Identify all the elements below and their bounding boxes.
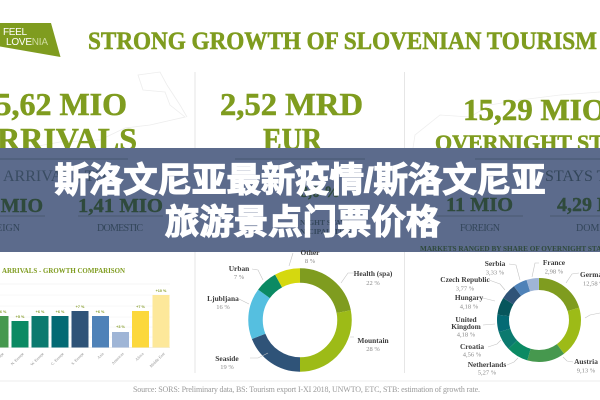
donut labels: markets: Kingdom — [451, 322, 482, 331]
stat: export revenue — [220, 86, 363, 157]
donut labels: destination type: 19 % — [220, 364, 234, 371]
donut chart: tourism by destination type — [256, 276, 344, 364]
stat: export revenue: EUR — [263, 121, 323, 157]
bar chart: S. Europe — [70, 351, 85, 366]
bar chart: +6 % — [56, 310, 65, 314]
band sub-stats left — [0, 159, 163, 234]
bar chart: C. Europe — [50, 351, 65, 366]
donut labels: destination type: 8 % — [305, 258, 316, 265]
donut labels: destination type — [207, 248, 393, 371]
donut labels: destination type: 16 % — [216, 304, 230, 311]
donut labels: destination type: Health (spa) — [354, 269, 393, 278]
donut labels: markets: 4,56 % — [463, 352, 482, 358]
logo: Feel Slovenia: FEEL — [3, 27, 27, 38]
donut labels: markets: Netherlands — [468, 360, 506, 369]
band sub-stats left: DOMESTIC — [97, 223, 143, 234]
column divider left — [194, 72, 196, 373]
bar chart: +6 % — [96, 310, 105, 314]
map outline: right — [413, 92, 600, 148]
bar chart: +10 % — [156, 289, 167, 293]
bar chart: N. Europe — [10, 351, 25, 366]
bar chart: W. Europe — [29, 351, 45, 367]
bar chart title: ARRIVALS - GROWTH COMPARISON — [2, 266, 125, 275]
logo: Feel Slovenia — [0, 23, 60, 57]
donut labels: markets: 3,77 % — [456, 286, 475, 292]
band sub-stats right: FOREIGN — [460, 223, 500, 234]
stat: arrivals — [0, 86, 137, 157]
band sub-stats left: ARRIVALS TO — [3, 168, 106, 185]
donut labels: markets: Croatia — [460, 342, 484, 351]
band sub-stats middle — [235, 159, 365, 236]
bar chart: +7 % — [76, 305, 85, 309]
column divider right — [404, 72, 406, 373]
band sub-stats right — [437, 159, 600, 234]
donut labels: destination type: 28 % — [366, 346, 380, 353]
band sub-stats middle: 8,0 % — [300, 184, 340, 201]
band sub-stats right: 11 MIO — [446, 194, 513, 216]
stat: export revenue: 2,52 MRD — [220, 86, 363, 122]
headline overlay text — [54, 162, 546, 242]
donut labels: markets: United — [455, 315, 478, 324]
donut labels: markets: Czech Republic — [440, 275, 490, 284]
donut chart: markets by overnight stays — [503, 284, 575, 356]
donut labels: markets: France — [543, 258, 566, 267]
headline overlay text: 斯洛文尼亚最新疫情/斯洛文尼亚 — [54, 162, 546, 200]
donut labels: markets — [440, 258, 600, 376]
donut labels: destination type: 7 % — [234, 274, 245, 281]
donut labels: destination type: Ljubljana — [207, 294, 239, 303]
donut labels: destination type: Mountain — [357, 336, 389, 345]
donut labels: destination type: Other — [301, 248, 320, 257]
bar chart: Americas — [110, 351, 125, 366]
bar chart — [0, 284, 170, 368]
overlay band — [0, 148, 600, 252]
footer rule — [0, 380, 600, 382]
bar chart: Africa — [134, 351, 145, 362]
donut labels: markets: Serbia — [485, 259, 506, 268]
bar chart: +5 % — [16, 315, 25, 319]
donut labels: markets: 4,18 % — [460, 304, 479, 310]
source note: Source: SORS: Preliminary data, BS: Tourism export I-XI 2018, UNWTO, ETC, STB: estimation of growth rate. — [133, 385, 480, 394]
donut labels: destination type: Urban — [229, 264, 249, 273]
donut labels: markets: Hungary — [455, 293, 483, 302]
bar chart: +3 % — [116, 325, 126, 329]
bar chart: Asia — [96, 351, 105, 360]
headline overlay text: 旅游景点门票价格 — [165, 204, 440, 242]
donut labels: markets: 2,98 % — [545, 268, 564, 276]
donut labels: markets: 5,27 % — [478, 370, 497, 376]
donut labels: destination type: Seaside — [215, 354, 239, 363]
bar chart: +7 % — [136, 305, 146, 309]
band sub-stats middle: NICIPALITIES — [300, 227, 351, 236]
donut labels: markets: Austria — [574, 357, 598, 366]
logo: Feel Slovenia: LOVENIA — [6, 37, 48, 48]
donut labels: destination type: 22 % — [366, 280, 380, 287]
band sub-stats left: 1,41 MIO — [78, 195, 163, 217]
map outline: left — [0, 72, 187, 153]
stat: overnight stays — [435, 92, 600, 155]
band sub-stats middle: NIGHT STAYS — [300, 218, 350, 227]
donut labels: markets: 9,13 % — [577, 368, 596, 374]
bar chart: Middle East — [148, 351, 166, 368]
bar chart: +6 % — [36, 310, 45, 314]
donut labels: markets: 3,33 % — [486, 270, 505, 276]
donut labels: markets: 4,18 % — [457, 332, 476, 338]
